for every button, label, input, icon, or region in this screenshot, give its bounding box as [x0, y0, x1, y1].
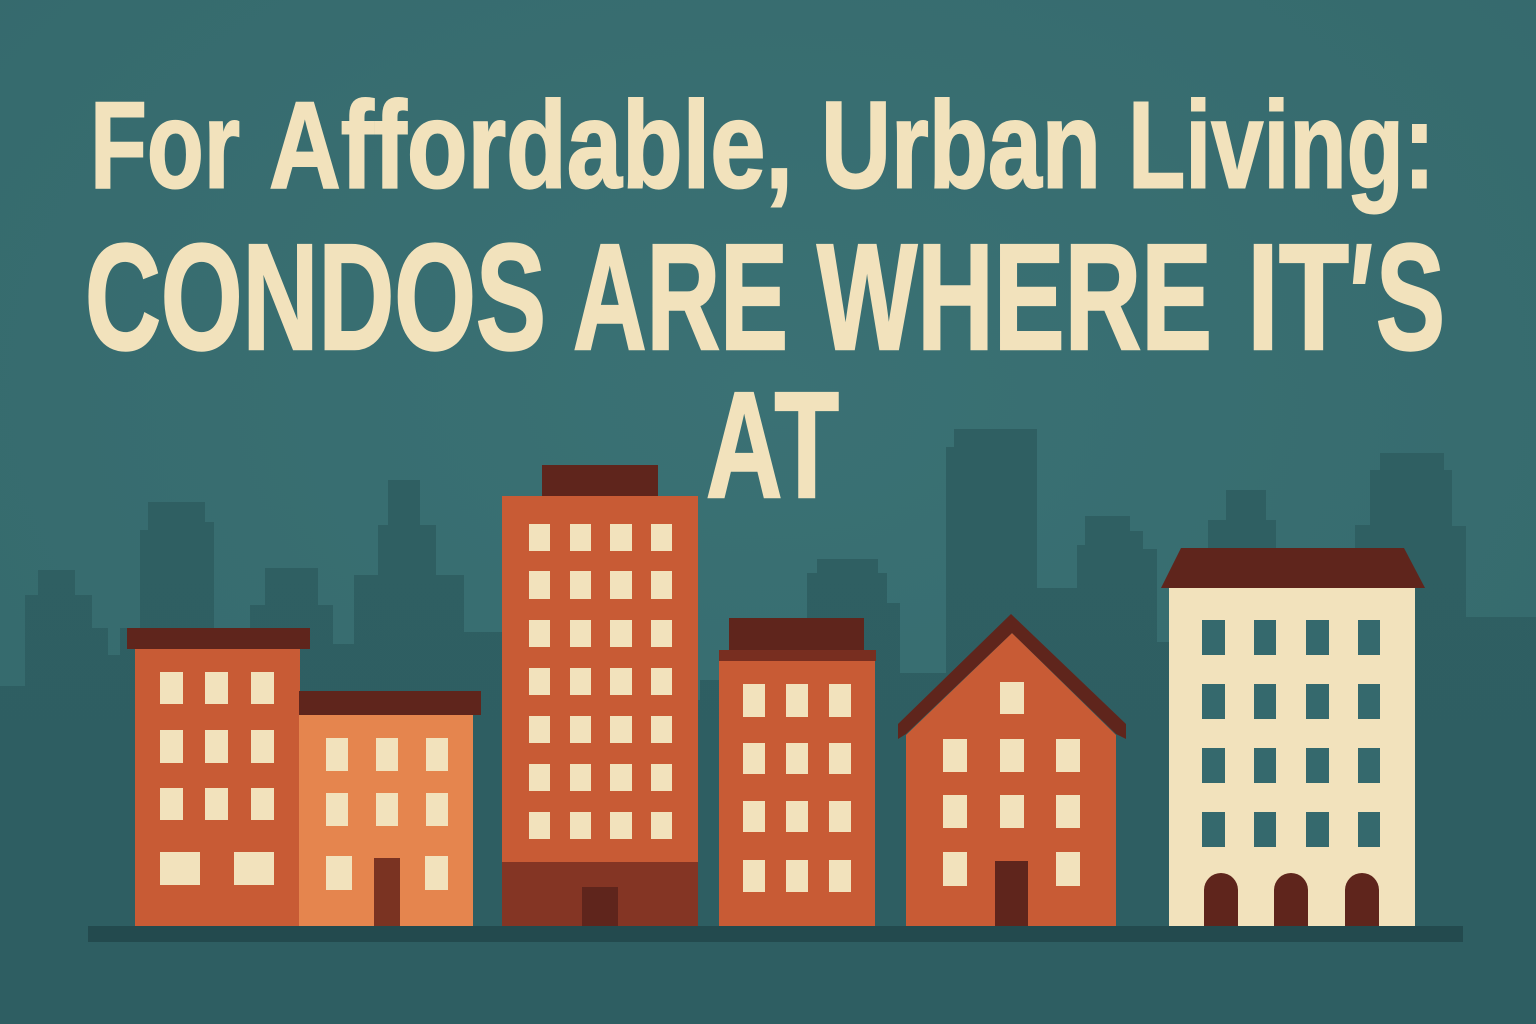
building 4: mid-rise with stepped roof	[719, 618, 876, 926]
building 5: gabled house	[898, 614, 1126, 926]
title line 1: For	[90, 78, 240, 214]
title line 2: WHERE	[817, 212, 1212, 381]
ground line	[88, 926, 1463, 942]
title line 2: IT	[1247, 212, 1349, 381]
title	[85, 78, 1445, 529]
skyline silhouette	[0, 429, 1536, 1024]
title line 2: '	[1344, 212, 1371, 381]
building 1: brick tower with flat roof	[127, 628, 310, 926]
title line 1: Living:	[1128, 78, 1435, 214]
title line 1: Affordable,	[269, 78, 793, 214]
title line 2: CONDOS	[85, 212, 546, 381]
building 3: tall central tower	[502, 465, 698, 926]
title line 1: Urban	[821, 78, 1101, 214]
title line 2: S	[1376, 212, 1445, 381]
title line 2: ARE	[573, 212, 788, 381]
building 6: cream apartment block	[1161, 548, 1425, 926]
title line 3: AT	[706, 360, 839, 529]
title line 1	[90, 78, 1435, 214]
title line 2	[85, 212, 1445, 381]
building 2: orange low-rise	[299, 691, 481, 926]
